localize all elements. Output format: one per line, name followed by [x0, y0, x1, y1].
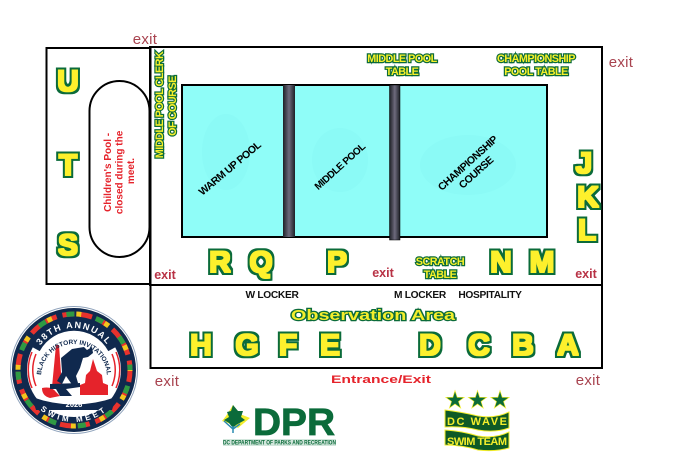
station letters: L: [578, 214, 596, 247]
panel: observation area: [150, 285, 602, 368]
text: exit labels outside: [133, 31, 634, 390]
station letters: B: [512, 329, 534, 362]
text: table labels: MIDDLE POOL CLERK: [154, 51, 166, 158]
stars: ★★★: [444, 387, 512, 414]
logo: black history invitational: SWIM MEET: [41, 406, 104, 422]
bottom banner: [32, 397, 116, 410]
text: table labels: CHAMPIONSHIP: [497, 53, 575, 65]
text: exit labels outside: exit: [155, 373, 180, 390]
text: exit labels outside: exit: [609, 54, 634, 71]
text: locker labels: [245, 290, 522, 301]
text: exit labels outside: exit: [133, 31, 158, 48]
water tint: warm up: [202, 114, 250, 190]
logo: black history invitational: BLACK HISTORY INVITATIONAL: [36, 340, 112, 375]
station letters: M: [530, 246, 554, 279]
panel: left area: [46, 48, 150, 284]
logo: DC Wave swim team: SWIM TEAM: [447, 436, 507, 448]
divider wall: [149, 47, 152, 285]
text: locker labels: W LOCKER: [245, 290, 299, 301]
heading: observation area: Observation Area: [291, 307, 456, 324]
text: children's pool label: meet.: [126, 158, 137, 184]
station letters: E: [320, 329, 340, 362]
logo: black history invitational: [10, 306, 138, 434]
logo: DC Wave swim team: DC WAVE: [447, 416, 507, 428]
text: table labels: POOL TABLE: [504, 66, 568, 78]
text: warm up pool: WARM UP POOL: [197, 139, 264, 198]
text: exit labels inside: [154, 266, 598, 282]
banner 1: [445, 410, 509, 431]
logo: DC Wave swim team: [444, 387, 512, 451]
station letters: T: [59, 149, 77, 182]
capitol: [80, 359, 108, 395]
text: locker labels: HOSPITALITY: [458, 290, 522, 301]
text: entrance/exit: Entrance/Exit: [331, 374, 431, 386]
station letters: H: [190, 329, 212, 362]
text: exit labels inside: exit: [575, 267, 598, 281]
water tint: championship: [420, 135, 516, 195]
text: championship course: CHAMPIONSHIP: [436, 133, 500, 193]
text: exit labels outside: exit: [576, 372, 601, 389]
text: table labels: TABLE: [386, 66, 419, 78]
text: exit labels inside: exit: [372, 266, 395, 280]
monument: [52, 345, 62, 387]
panel: children's pool: [90, 81, 150, 257]
station letters: R: [209, 246, 231, 279]
text: exit labels inside: exit: [154, 268, 177, 282]
lane divider right: [390, 85, 400, 240]
station letters: K: [577, 181, 599, 214]
text: table labels: [154, 51, 575, 281]
logo: DPR: DPR: [253, 402, 335, 444]
station letters: Q: [249, 246, 273, 279]
text: table labels: OF COURSE: [167, 76, 179, 136]
station letters: J: [576, 147, 592, 180]
kente ring: [18, 314, 130, 426]
text: middle pool: MIDDLE POOL: [313, 141, 368, 193]
text: children's pool label: closed during the: [114, 130, 126, 214]
top banner: [34, 324, 114, 348]
logo: DPR: [222, 402, 336, 446]
station letters: A: [557, 329, 579, 362]
station letters: U: [57, 65, 79, 98]
panel: pool: [182, 85, 547, 240]
station letters: C: [468, 329, 490, 362]
logo text: 38TH ANNUAL: [36, 322, 110, 345]
station letters: [57, 65, 599, 362]
station letters: S: [58, 229, 78, 262]
logo: DPR: DC DEPARTMENT OF PARKS AND RECREATION: [223, 440, 336, 446]
text: table labels: SCRATCH: [416, 256, 465, 268]
text: locker labels: M LOCKER: [394, 290, 447, 301]
starting block: [50, 383, 80, 396]
text: children's pool label: Children's Pool -: [103, 133, 114, 212]
logo: black history invitational: 2026: [66, 400, 82, 409]
station letters: D: [419, 329, 441, 362]
side arcs: [28, 352, 120, 388]
swimmer: [57, 347, 93, 386]
station letters: N: [490, 246, 512, 279]
station letters: F: [279, 329, 297, 362]
leaf icon: [222, 405, 250, 433]
banner 2: [445, 430, 509, 451]
lane divider left: [283, 85, 295, 237]
red wave: [42, 388, 60, 398]
text: championship course: COURSE: [457, 154, 496, 191]
panel: main pool hall: [150, 47, 602, 285]
text: table labels: TABLE: [424, 269, 457, 281]
station letters: P: [327, 246, 347, 279]
station letters: G: [235, 329, 259, 362]
water tint: middle: [312, 128, 368, 192]
text: table labels: MIDDLE POOL: [367, 53, 438, 65]
